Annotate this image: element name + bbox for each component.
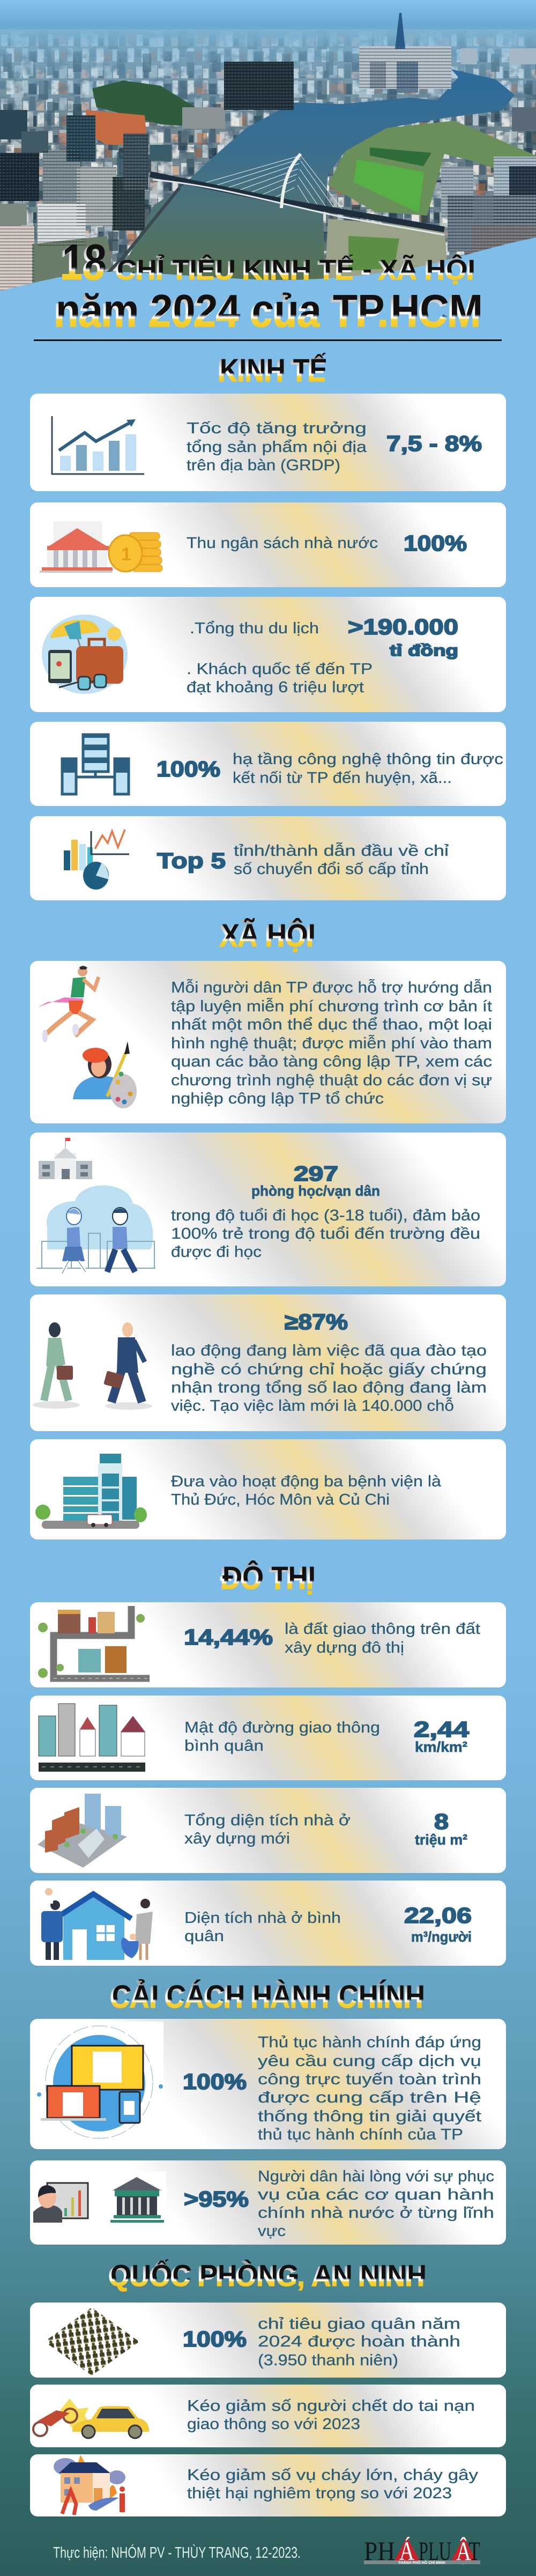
description: Thu ngân sách nhà nước xyxy=(187,535,378,552)
panel: citizen satisfaction xyxy=(30,2160,506,2245)
description: vực xyxy=(258,2223,286,2240)
description xyxy=(234,842,449,878)
description: là đất giao thông trên đất xyxy=(285,1620,480,1638)
logo: Pháp Luật: Ậ xyxy=(456,2536,471,2566)
description: Đưa vào hoạt động ba bệnh viện là xyxy=(171,1473,442,1490)
icon: painter xyxy=(73,1041,137,1108)
description xyxy=(258,2168,494,2240)
panel: digital transformation xyxy=(30,816,506,900)
description: Diện tích nhà ở bình xyxy=(184,1909,341,1927)
logo: Pháp Luật: PH xyxy=(364,2536,395,2566)
panel: IT infrastructure xyxy=(30,722,506,806)
figure: phòng học/vạn dân xyxy=(251,1183,380,1199)
heading: KINH TẾ: KINH TẾ xyxy=(220,352,327,386)
description: thống thông tin giải quyết xyxy=(258,2108,481,2125)
figure: 100% xyxy=(183,2327,247,2351)
icon: firefighters and house xyxy=(54,2455,125,2515)
figure: 100% xyxy=(157,757,220,781)
heading: CẢI CÁCH HÀNH CHÍNH: CẢI CÁCH HÀNH CHÍNH xyxy=(112,1979,425,2012)
figure: 7,5 - 8% xyxy=(386,431,482,456)
heading: QUỐC PHÒNG, AN NINH: QUỐC PHÒNG, AN NINH xyxy=(110,2259,427,2291)
description: .Tổng thu du lịch xyxy=(190,620,319,637)
figure xyxy=(348,615,458,660)
description xyxy=(258,2315,460,2369)
description: nghề có chứng chỉ hoặc giấy chứng xyxy=(171,1361,487,1378)
description: bình quân xyxy=(184,1737,264,1755)
heading: XÃ HỘI: XÃ HỘI xyxy=(219,919,314,953)
description: . Khách quốc tế đến TP xyxy=(187,661,373,678)
icon: hospital xyxy=(35,1454,147,1529)
panel: new housing xyxy=(30,1788,506,1873)
description: nhận trong tổng số lao động đang làm xyxy=(171,1379,487,1396)
figure xyxy=(414,1717,469,1755)
panel: trained labour xyxy=(30,1294,506,1431)
icon: charts xyxy=(64,830,129,890)
icon: building and coins: 1 xyxy=(121,544,131,565)
description: tỉnh/thành dẫn đầu về chỉ xyxy=(234,842,449,860)
description: thiệt hại nghiêm trọng so với 2023 xyxy=(187,2485,452,2502)
description: thủ tục hành chính của TP xyxy=(258,2126,463,2143)
description xyxy=(187,2397,475,2433)
panel: tourism xyxy=(30,597,506,712)
icon: growth chart xyxy=(52,416,144,474)
figure: ≥87% xyxy=(285,1309,348,1334)
heading: XÃ HỘI: XÃ HỘI xyxy=(221,917,316,951)
description: Thủ tục hành chính đáp ứng xyxy=(258,2034,481,2051)
icon: devices xyxy=(32,2022,163,2142)
heading: QUỐC PHÒNG, AN NINH: QUỐC PHÒNG, AN NINH xyxy=(108,2261,425,2292)
description: kết nối từ TP đến huyện, xã... xyxy=(233,769,452,787)
icon: servers xyxy=(62,734,129,794)
figure: 8 xyxy=(434,1809,449,1834)
description: 100% trẻ trong độ tuổi đến trường đều xyxy=(171,1225,480,1242)
figure xyxy=(404,1903,472,1945)
description: đạt khoảng 6 triệu lượt xyxy=(187,679,364,696)
panel: housing area xyxy=(30,1881,506,1966)
description: trong độ tuổi đi học (3-18 tuổi), đảm bảo xyxy=(171,1207,480,1224)
icon: street buildings xyxy=(39,1704,145,1772)
description: tổng sản phẩm nội địa xyxy=(187,439,367,456)
description xyxy=(171,1342,487,1415)
heading: ĐÔ THỊ: ĐÔ THỊ xyxy=(222,1560,316,1594)
figure: triệu m² xyxy=(415,1832,467,1848)
title: năm 2024 của TP.HCM xyxy=(56,286,483,334)
icon: students xyxy=(36,1186,155,1274)
figure: 100% xyxy=(183,2069,247,2094)
description: số chuyển đổi số cấp tỉnh xyxy=(234,861,429,878)
panel: sport and arts xyxy=(30,961,506,1123)
logo: Pháp Luật: T xyxy=(468,2536,480,2566)
description xyxy=(184,1719,380,1755)
description xyxy=(184,1812,351,1847)
logo: Pháp Luật: PLU xyxy=(419,2536,451,2566)
icon: isometric estate xyxy=(38,1794,127,1868)
icon: family and house xyxy=(41,1888,153,1960)
panel: traffic land xyxy=(30,1602,506,1687)
description xyxy=(184,1909,341,1945)
description: lao động đang làm việc đã qua đào tạo xyxy=(171,1342,487,1359)
description: 2024 được hoàn thành xyxy=(258,2333,460,2350)
figure: >95% xyxy=(184,2187,249,2211)
icon: city road xyxy=(38,1606,150,1678)
description xyxy=(187,420,367,474)
description xyxy=(187,2467,479,2502)
description: quan các bảo tàng công lập TP, xem các xyxy=(171,1053,492,1070)
logo: Pháp Luật: THÀNH PHỐ HỒ CHÍ MINH xyxy=(398,2560,445,2565)
panel: fires xyxy=(30,2454,506,2516)
description: được cung cấp trên Hệ xyxy=(258,2089,481,2106)
icon: travel suitcase xyxy=(42,615,128,694)
description: vụ của các cơ quan hành xyxy=(258,2186,494,2203)
icon: presenter and government building xyxy=(33,2172,166,2228)
description xyxy=(258,2034,481,2143)
figure xyxy=(415,1809,467,1848)
figure: Top 5 xyxy=(157,848,226,873)
icon: soldiers formation xyxy=(44,2307,139,2375)
description: Tốc độ tăng trưởng xyxy=(187,420,367,437)
title: CHỈ TIÊU KINH TẾ - XÃ HỘI xyxy=(117,254,475,284)
icon: runner xyxy=(38,966,99,1042)
description: Mật độ đường giao thông xyxy=(184,1719,380,1736)
description: chính nhà nước ở từng lĩnh xyxy=(258,2204,494,2222)
figure: 22,06 xyxy=(404,1903,472,1928)
icon: car and motorbike crash xyxy=(33,2399,149,2438)
icon: school xyxy=(39,1138,92,1179)
description: Kéo giảm số vụ cháy lớn, cháy gây xyxy=(187,2467,479,2484)
hero bridge xyxy=(107,154,444,273)
panel: online public services xyxy=(30,2019,506,2149)
panel: military recruitment xyxy=(30,2303,506,2378)
title xyxy=(34,236,502,341)
title: CHỈ TIÊU KINH TẾ - XÃ HỘI xyxy=(115,256,474,285)
description: yêu cầu cung cấp dịch vụ xyxy=(258,2053,481,2070)
panel: road density xyxy=(30,1696,506,1780)
description: hạ tầng công nghệ thông tin được xyxy=(233,751,503,768)
description: quân xyxy=(184,1928,224,1945)
description: Người dân hài lòng với sự phục xyxy=(258,2168,494,2185)
icon: building and coins xyxy=(40,521,162,573)
description xyxy=(171,1207,480,1261)
description: việc. Tạo việc làm mới là 140.000 chỗ xyxy=(171,1397,454,1415)
title: 18 xyxy=(60,236,105,290)
logo: Pháp Luật: Á xyxy=(399,2536,414,2566)
panel: GRDP growth xyxy=(30,394,506,491)
description: được đi học xyxy=(171,1243,262,1261)
description: hình nghệ thuật; được miễn phí vào tham xyxy=(171,1034,492,1052)
description: Thủ Đức, Hóc Môn và Củ Chi xyxy=(171,1491,390,1508)
figure: tỉ đồng xyxy=(390,642,458,660)
figure: 14,44% xyxy=(184,1625,273,1649)
figure: km/km² xyxy=(415,1739,467,1755)
figure: m³/người xyxy=(411,1929,472,1945)
title: năm 2024 của TP.HCM xyxy=(54,288,481,336)
hero photo: Saigon river skyline xyxy=(0,11,536,291)
description: Mỗi người dân TP được hỗ trợ hướng dẫn xyxy=(171,979,492,996)
figure: >190.000 xyxy=(348,615,458,639)
description xyxy=(171,979,492,1107)
hero buildings xyxy=(0,13,536,293)
description: (3.950 thanh niên) xyxy=(258,2352,398,2369)
panel: state budget xyxy=(30,502,506,587)
description: chương trình nghệ thuật do các đơn vị sự xyxy=(171,1072,492,1089)
logo: Pháp Luật xyxy=(364,2536,480,2566)
title: 18 xyxy=(62,236,107,288)
description: tập luyện miễn phí chương trình cơ bản ít xyxy=(171,997,492,1015)
description xyxy=(285,1620,480,1656)
description: công trực tuyến toàn trình xyxy=(258,2071,481,2088)
panel: hospitals xyxy=(30,1439,506,1539)
description: Tổng diện tích nhà ở xyxy=(184,1812,351,1829)
heading: CẢI CÁCH HÀNH CHÍNH: CẢI CÁCH HÀNH CHÍNH xyxy=(110,1980,423,2014)
figure: 297 xyxy=(294,1163,338,1186)
description: xây dựng mới xyxy=(184,1830,290,1847)
figure: 2,44 xyxy=(414,1717,469,1742)
description xyxy=(187,620,373,696)
description: chỉ tiêu giao quân năm xyxy=(258,2315,460,2333)
description: trên địa bàn (GRDP) xyxy=(187,457,340,474)
panel: traffic accidents xyxy=(30,2385,506,2447)
description xyxy=(233,751,503,787)
panel: classrooms xyxy=(30,1132,506,1286)
description: giao thông so với 2023 xyxy=(187,2416,360,2433)
description: Kéo giảm số người chết do tai nạn xyxy=(187,2397,475,2415)
figure xyxy=(251,1163,380,1199)
description xyxy=(171,1473,442,1508)
description: xây dựng đô thị xyxy=(285,1639,404,1656)
icon: workers xyxy=(33,1322,152,1410)
heading: ĐÔ THỊ: ĐÔ THỊ xyxy=(220,1561,314,1595)
figure: 100% xyxy=(404,531,467,556)
description: nghiệp công lập TP tổ chức xyxy=(171,1090,384,1107)
description: nhất một môn thể dục thể thao, một loại xyxy=(171,1016,492,1033)
